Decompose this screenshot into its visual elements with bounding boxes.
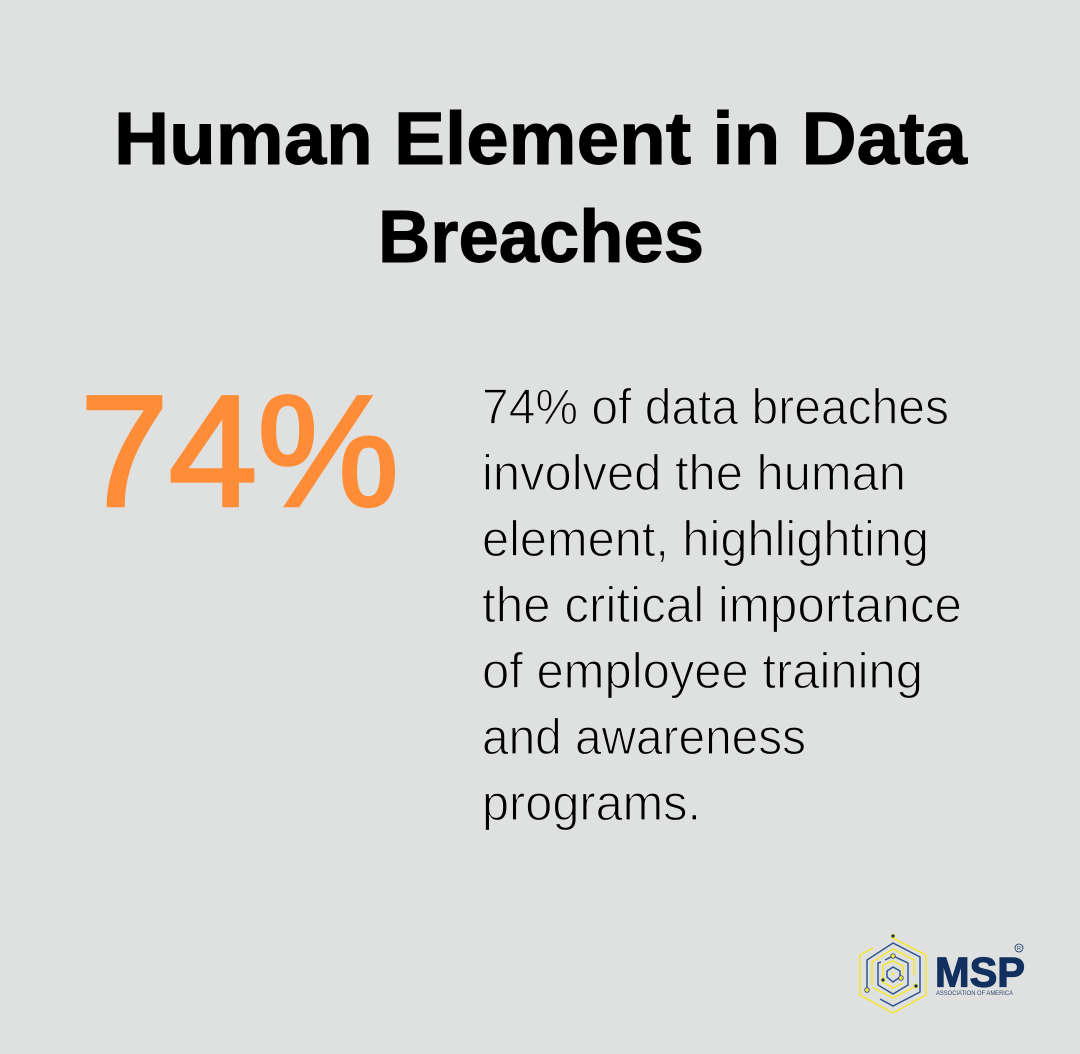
registered mark: R (1017, 946, 1021, 952)
description text (482, 379, 962, 831)
title (114, 97, 968, 278)
description text: of employee training (482, 643, 923, 699)
logo: MSP Association of America (860, 934, 1025, 1013)
description text: and awareness (482, 709, 806, 765)
description text: element, highlighting (482, 511, 929, 567)
description text: programs. (482, 775, 701, 831)
big statistic: 74%: 74% (80, 364, 399, 540)
title: Breaches (378, 195, 704, 278)
logo wordmark: MSP (935, 948, 1025, 996)
logo tagline: ASSOCIATION OF AMERICA (936, 990, 1014, 997)
description text: involved the human (482, 445, 906, 501)
title: Human Element in Data (114, 97, 968, 180)
description text: 74% of data breaches (482, 379, 949, 435)
description text: the critical importance (482, 577, 962, 633)
registered mark (1015, 944, 1023, 952)
icon: concentric circuit hexagons (860, 934, 926, 1013)
